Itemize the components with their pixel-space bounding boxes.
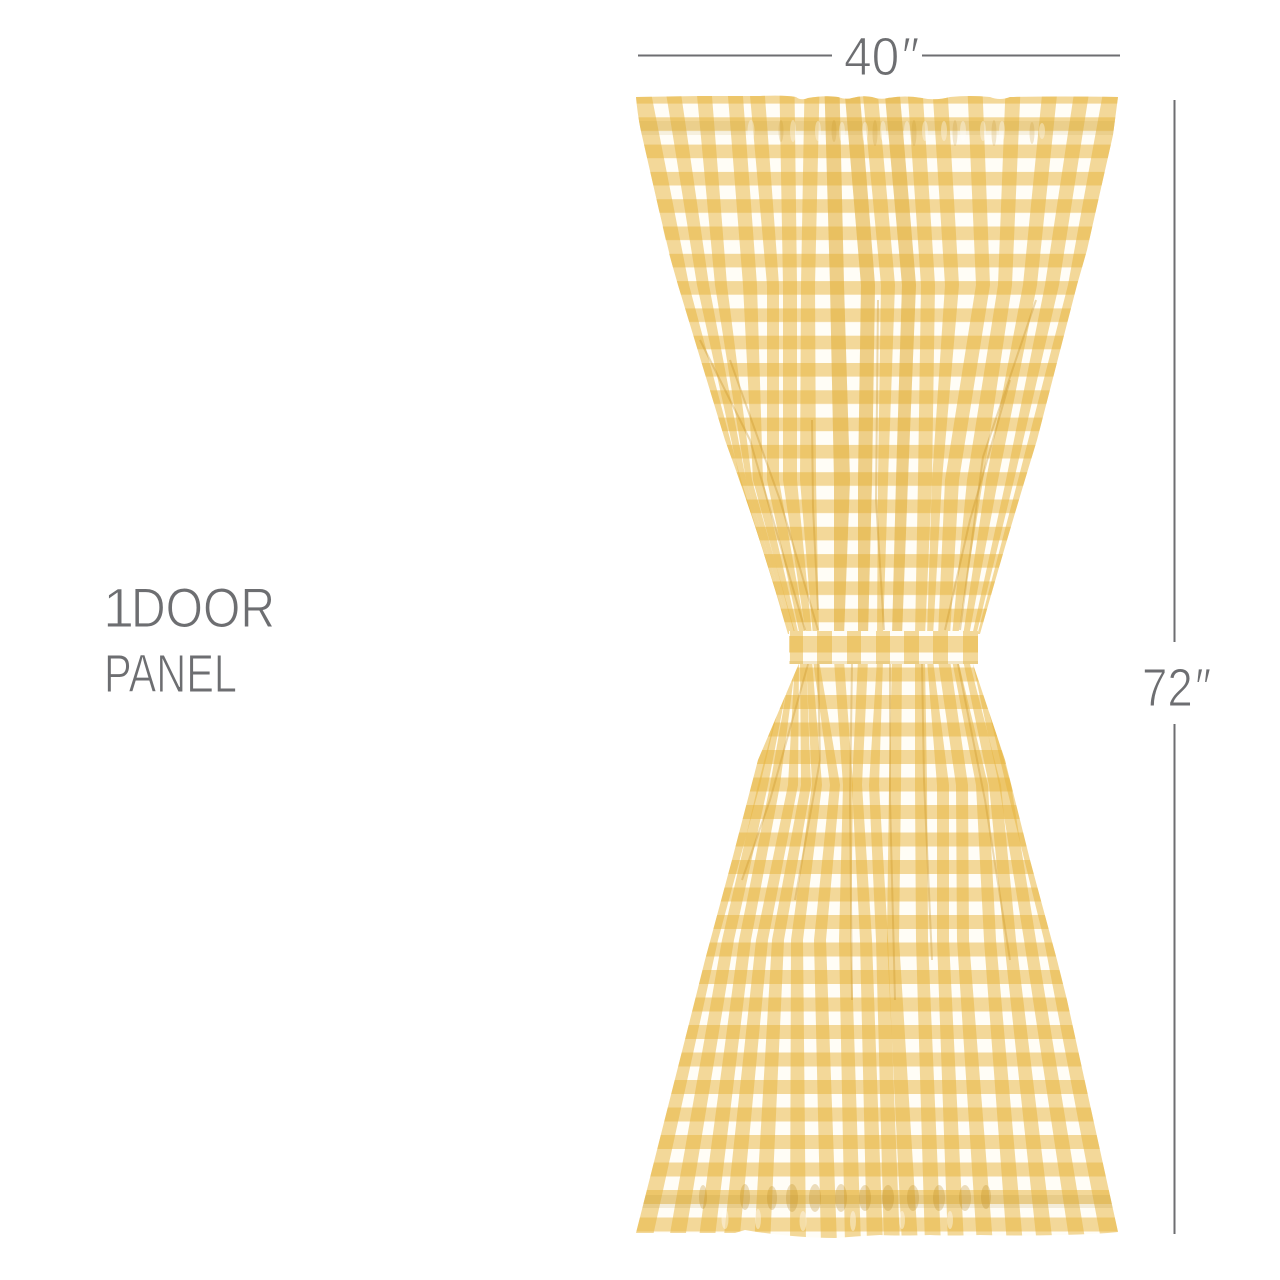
lower curtain fan xyxy=(630,655,1125,1245)
upper curtain fan xyxy=(630,90,1125,640)
fabric tie-back band xyxy=(789,631,978,664)
product label: 1 door panel xyxy=(103,576,275,704)
fold lines below tie xyxy=(742,664,1010,1000)
height dimension: 72 inches: 72″ xyxy=(1142,658,1211,718)
gingham curtain panel xyxy=(630,90,1125,1245)
emphasised pleat columns xyxy=(824,90,916,636)
product label: 1 door panel: 1 xyxy=(103,576,134,639)
product label: 1 door panel: PANEL xyxy=(104,644,237,704)
width dimension: 40 inches: 40″ xyxy=(844,27,919,87)
fold lines above tie xyxy=(700,300,1036,630)
upper rod pocket xyxy=(636,120,1118,146)
lower rod pocket xyxy=(636,1184,1118,1231)
product label: 1 door panel: DOOR xyxy=(131,576,275,639)
